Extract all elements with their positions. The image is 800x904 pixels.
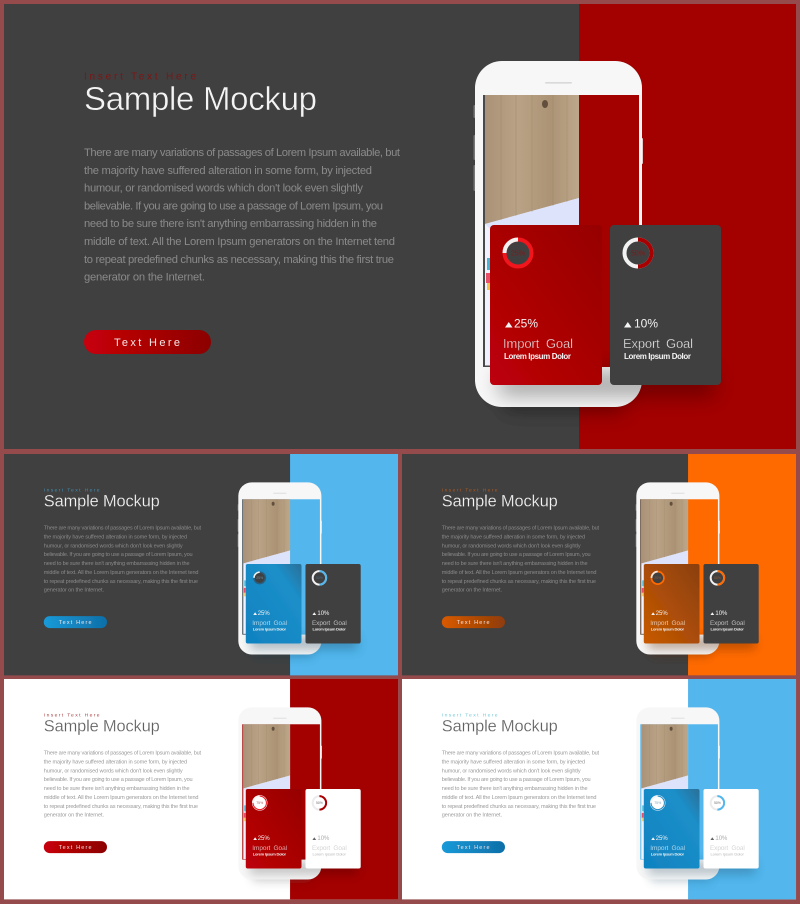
eyebrow: Insert Text Here xyxy=(44,713,100,719)
button: Text Here xyxy=(457,845,490,851)
body text: believable. If you are going to use a passage of Lorem Ipsum, you xyxy=(442,777,591,783)
colour panel xyxy=(290,679,398,899)
donut chart: export xyxy=(624,240,652,266)
body text: middle of text. All the Lorem Ipsum generators on the Internet tend xyxy=(44,570,199,576)
card subtext: import: Lorem Ipsum Dolor xyxy=(651,852,685,857)
body text: generator on the Internet. xyxy=(84,272,205,284)
change value: import: 25% xyxy=(258,836,270,842)
card: import goal xyxy=(246,789,302,869)
phone mockup xyxy=(238,482,322,656)
body text: There are many variations of passages of Lorem Ipsum available, but xyxy=(44,751,201,757)
title: Sample Mockup xyxy=(442,718,558,736)
body text: to repeat predefined chunks as necessary, making this the first true xyxy=(442,579,596,585)
slide: white blue xyxy=(402,679,796,899)
change value: export: 10% xyxy=(317,611,330,617)
card: import goal xyxy=(490,225,602,385)
card subtext: import: Lorem Ipsum Dolor xyxy=(504,352,571,361)
title: Sample Mockup xyxy=(442,493,558,511)
phone mockup xyxy=(238,707,322,881)
donut chart: export: 50% xyxy=(714,576,721,580)
button: Text Here xyxy=(457,620,490,626)
eyebrow: Insert Text Here xyxy=(44,488,100,494)
card: import goal xyxy=(644,564,700,644)
body text: need to be sure there isn't anything embarrassing hidden in the xyxy=(84,218,377,230)
slide background xyxy=(402,679,796,899)
eyebrow: Insert Text Here xyxy=(84,72,196,82)
body text xyxy=(84,147,401,284)
slide background xyxy=(4,4,796,449)
body text: There are many variations of passages of Lorem Ipsum available, but xyxy=(84,147,401,159)
card heading: import: Import Goal xyxy=(503,336,573,351)
change value: export: 10% xyxy=(317,836,330,842)
slide background xyxy=(4,679,398,899)
card shadows xyxy=(499,372,714,396)
colour panel xyxy=(688,679,796,899)
body text: the majority have suffered alteration in some form, by injected xyxy=(44,535,187,541)
button xyxy=(442,616,505,628)
slide: dark blue xyxy=(4,454,398,675)
body text: There are many variations of passages of Lorem Ipsum available, but xyxy=(442,751,599,757)
body text: the majority have suffered alteration in some form, by injected xyxy=(442,760,585,766)
colour panel xyxy=(290,454,398,675)
card: export goal xyxy=(305,564,361,644)
button xyxy=(44,616,107,628)
button: Text Here xyxy=(59,620,92,626)
change value: import: 25% xyxy=(656,836,668,842)
body text: humour, or randomised words which don't look even slightly xyxy=(44,768,183,774)
slide background xyxy=(402,454,796,675)
body text: believable. If you are going to use a passage of Lorem Ipsum, you xyxy=(84,200,383,212)
body text: humour, or randomised words which don't look even slightly xyxy=(442,768,581,774)
body text xyxy=(44,526,201,594)
card subtext: export: Lorem Ipsum Dolor xyxy=(312,627,346,632)
body text: to repeat predefined chunks as necessary, making this the first true xyxy=(44,579,198,585)
body text: There are many variations of passages of Lorem Ipsum available, but xyxy=(44,526,201,532)
eyebrow: Insert Text Here xyxy=(442,713,498,719)
slide: white red xyxy=(4,679,398,899)
body text xyxy=(44,751,201,819)
donut chart: import: 25% xyxy=(511,250,525,258)
phone mockup xyxy=(636,482,720,656)
card subtext: export: Lorem Ipsum Dolor xyxy=(710,627,744,632)
body text: generator on the Internet. xyxy=(442,588,502,594)
body text xyxy=(442,751,599,819)
donut chart: import: 25% xyxy=(256,576,263,580)
body text: need to be sure there isn't anything embarrassing hidden in the xyxy=(442,561,588,567)
card subtext: import: Lorem Ipsum Dolor xyxy=(651,627,685,632)
button xyxy=(442,841,505,853)
button: Text Here xyxy=(114,337,180,349)
donut chart: export: 50% xyxy=(316,576,323,580)
button xyxy=(84,330,211,354)
card heading: export: Export Goal xyxy=(312,845,347,852)
card: export goal xyxy=(305,789,361,869)
body text: middle of text. All the Lorem Ipsum generators on the Internet tend xyxy=(442,795,597,801)
change value: export: 10% xyxy=(634,316,658,330)
button xyxy=(44,841,107,853)
body text: humour, or randomised words which don't look even slightly xyxy=(84,182,363,194)
card: export goal xyxy=(703,564,759,644)
body text: middle of text. All the Lorem Ipsum generators on the Internet tend xyxy=(442,570,597,576)
change value: import: 25% xyxy=(258,611,270,617)
card heading: import: Import Goal xyxy=(650,620,685,627)
body text: to repeat predefined chunks as necessary, making this the first true xyxy=(442,804,596,810)
change value: import: 25% xyxy=(656,611,668,617)
body text: generator on the Internet. xyxy=(442,813,502,819)
donut chart: import: 25% xyxy=(654,576,661,580)
body text: need to be sure there isn't anything embarrassing hidden in the xyxy=(442,786,588,792)
body text: the majority have suffered alteration in some form, by injected xyxy=(44,760,187,766)
body text: believable. If you are going to use a passage of Lorem Ipsum, you xyxy=(44,552,193,558)
card subtext: export: Lorem Ipsum Dolor xyxy=(710,852,744,857)
donut chart: import: 75% xyxy=(654,801,661,805)
change value: export xyxy=(624,316,658,330)
change value: export: 10% xyxy=(715,611,728,617)
button: Text Here xyxy=(59,845,92,851)
body text: middle of text. All the Lorem Ipsum generators on the Internet tend xyxy=(44,795,199,801)
card shadows xyxy=(648,637,755,649)
slide background xyxy=(4,454,398,675)
donut chart: export: 50% xyxy=(714,801,721,805)
body text: believable. If you are going to use a passage of Lorem Ipsum, you xyxy=(442,552,591,558)
card: import goal xyxy=(246,564,302,644)
card shadows xyxy=(648,862,755,874)
body text: to repeat predefined chunks as necessary, making this the first true xyxy=(44,804,198,810)
body text: generator on the Internet. xyxy=(44,588,104,594)
eyebrow: Insert Text Here xyxy=(442,488,498,494)
body text: humour, or randomised words which don't look even slightly xyxy=(442,543,581,549)
phone mockup xyxy=(636,707,720,881)
change value: export: 10% xyxy=(715,836,728,842)
body text: There are many variations of passages of Lorem Ipsum available, but xyxy=(442,526,599,532)
body text: humour, or randomised words which don't look even slightly xyxy=(44,543,183,549)
card heading: import: Import Goal xyxy=(252,845,287,852)
card subtext: export: Lorem Ipsum Dolor xyxy=(312,852,346,857)
card: import goal xyxy=(644,789,700,869)
body text: believable. If you are going to use a passage of Lorem Ipsum, you xyxy=(44,777,193,783)
card heading: import: Import Goal xyxy=(252,620,287,627)
colour panel xyxy=(688,454,796,675)
card heading: export: Export Goal xyxy=(710,845,745,852)
card heading: export: Export Goal xyxy=(710,620,745,627)
body text: the majority have suffered alteration in some form, by injected xyxy=(84,165,372,177)
card shadows xyxy=(250,862,357,874)
body text: need to be sure there isn't anything embarrassing hidden in the xyxy=(44,561,190,567)
body text xyxy=(442,526,599,594)
colour panel xyxy=(579,4,796,449)
slide: dark orange xyxy=(402,454,796,675)
slide: large dark red xyxy=(4,4,796,449)
body text: to repeat predefined chunks as necessary, making this the first true xyxy=(84,254,394,266)
card heading: export: Export Goal xyxy=(623,336,693,351)
title: Sample Mockup xyxy=(44,718,160,736)
card subtext: import: Lorem Ipsum Dolor xyxy=(253,852,287,857)
body text: the majority have suffered alteration in some form, by injected xyxy=(442,535,585,541)
body text: need to be sure there isn't anything embarrassing hidden in the xyxy=(44,786,190,792)
card: export goal xyxy=(610,225,721,385)
card subtext: export: Lorem Ipsum Dolor xyxy=(624,352,691,361)
card subtext: import: Lorem Ipsum Dolor xyxy=(253,627,287,632)
phone mockup xyxy=(474,61,643,411)
donut chart: import xyxy=(504,240,532,266)
card shadows xyxy=(250,637,357,649)
donut chart: import: 75% xyxy=(256,801,263,805)
donut chart: export: 50% xyxy=(631,250,645,258)
card heading: import: Import Goal xyxy=(650,845,685,852)
donut chart: export: 50% xyxy=(316,801,323,805)
change value: import: 25% xyxy=(514,316,538,330)
title: Sample Mockup xyxy=(84,80,317,117)
body text: generator on the Internet. xyxy=(44,813,104,819)
title: Sample Mockup xyxy=(44,493,160,511)
card heading: export: Export Goal xyxy=(312,620,347,627)
body text: middle of text. All the Lorem Ipsum generators on the Internet tend xyxy=(84,236,395,248)
card: export goal xyxy=(703,789,759,869)
